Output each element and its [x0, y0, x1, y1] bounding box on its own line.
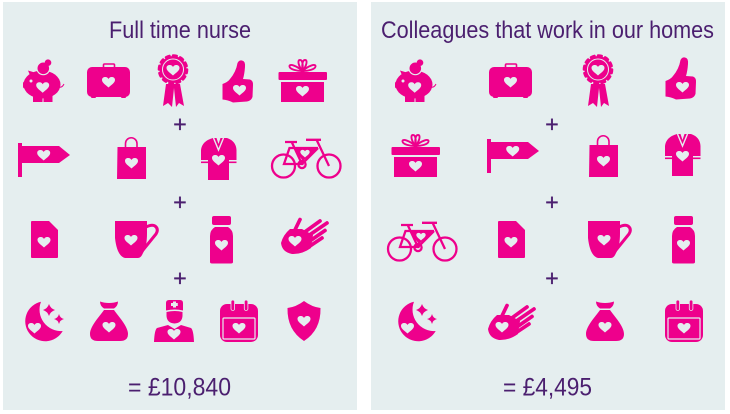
icon: tunic — [201, 138, 236, 180]
plus sign: + — [173, 265, 187, 291]
icon: medicine bottle — [210, 216, 233, 264]
icon: shield — [287, 301, 321, 341]
icon: bicycle — [272, 140, 340, 178]
heading: full time nurse: Full time nurse — [109, 17, 251, 44]
icon: moon and stars — [398, 302, 437, 341]
icon: thumbs up — [222, 60, 253, 102]
icon: gift box — [278, 60, 327, 102]
icon: mug — [588, 221, 630, 258]
icon: piggy bank — [395, 59, 436, 102]
icon: hand — [488, 306, 534, 340]
plus sign: + — [545, 265, 559, 291]
icon: tunic — [665, 134, 700, 176]
icon: signpost — [487, 139, 539, 173]
icon: rosette — [584, 56, 612, 107]
panel: full time nurse — [3, 2, 357, 410]
plus sign: + — [173, 189, 187, 215]
icon: document — [31, 221, 58, 258]
icon: suitcase — [87, 64, 130, 98]
total: full time nurse: = £10,840 — [128, 374, 231, 402]
icon: shopping bag — [589, 136, 618, 177]
icon: money bag — [90, 302, 128, 341]
icon: gift box — [392, 135, 440, 177]
icon: hand — [281, 220, 327, 254]
icon: thumbs up — [666, 57, 696, 100]
icon: calendar — [665, 300, 703, 342]
icon: medicine bottle — [672, 216, 695, 264]
plus sign: + — [545, 111, 559, 137]
icon: mug — [115, 221, 157, 258]
icon: signpost — [18, 143, 70, 177]
icon: suitcase — [489, 64, 532, 98]
icon: nurse — [154, 300, 194, 342]
icon: piggy bank — [23, 59, 64, 102]
icon: calendar — [220, 300, 258, 342]
icon: money bag — [586, 302, 624, 341]
panel: colleagues that work in our homes — [371, 2, 725, 410]
icon: bicycle — [388, 223, 456, 260]
icon: document — [498, 221, 525, 258]
icon: shopping bag — [117, 138, 146, 179]
plus sign: + — [545, 189, 559, 215]
icon: moon and stars — [25, 302, 64, 341]
plus sign: + — [173, 111, 187, 137]
total: colleagues that work in our homes: = £4,495 — [503, 374, 592, 402]
icon: rosette — [159, 56, 187, 107]
